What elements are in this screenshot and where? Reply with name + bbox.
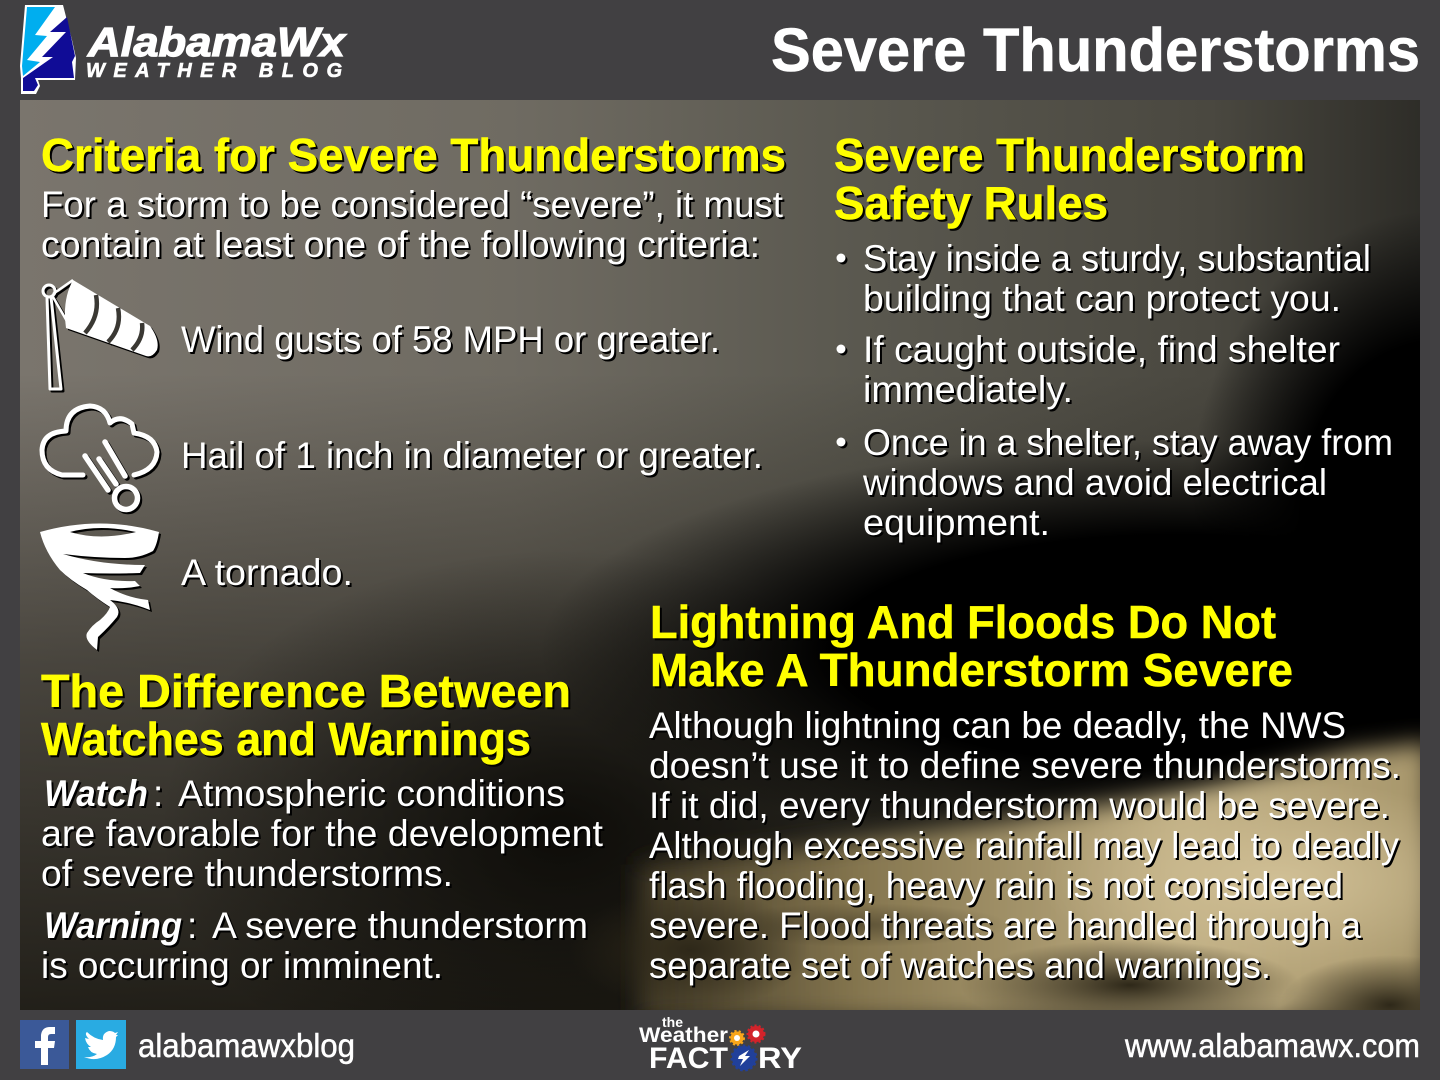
- logo: AlabamaWx Weather Blog: [20, 5, 347, 94]
- text: lightning and floods explanation: flash flooding, heavy rain is not considered: [649, 865, 1343, 906]
- text: lightning and floods explanation: severe. Flood threats are handled through a: [649, 905, 1361, 946]
- heading: lightning and floods: [650, 596, 1293, 696]
- heading: safety rules: Severe Thunderstorm: [834, 129, 1305, 181]
- heading: safety rules: Safety Rules: [834, 177, 1108, 229]
- list: safety rules: equipment.: [863, 502, 1050, 543]
- heading: safety rules: [834, 129, 1305, 229]
- section: criteria for severe thunderstorms: [40, 129, 786, 650]
- text: social handle: alabamawxblog: [138, 1027, 355, 1064]
- text: watch definition: Watch: [44, 773, 148, 814]
- list: safety rules: building that can protect you.: [863, 278, 1341, 319]
- icon: hail cloud: [42, 406, 157, 510]
- icon: blue gear: [732, 1046, 756, 1070]
- icon: facebook: [20, 1020, 69, 1069]
- text: hail criterion: Hail of 1 inch in diameter or greater.: [181, 435, 763, 476]
- text: criteria intro: contain at least one of the following criteria:: [41, 224, 760, 265]
- text: warning definition: is occurring or imminent.: [41, 945, 443, 986]
- text: tornado criterion: A tornado.: [181, 552, 353, 593]
- text: watch definition: :: [153, 773, 163, 814]
- text: watch definition: [41, 773, 604, 894]
- section: watches and warnings: [41, 665, 604, 986]
- list: safety rules: windows and avoid electrical: [862, 462, 1327, 503]
- heading: criteria: Criteria for Severe Thunderstorms: [41, 129, 786, 181]
- text: wind criterion: Wind gusts of 58 MPH or greater.: [181, 319, 720, 360]
- text: lightning and floods explanation: separate set of watches and warnings.: [649, 945, 1271, 986]
- heading: lightning and floods: Make A Thunderstorm Severe: [650, 644, 1293, 696]
- title: Severe Thunderstorms: [771, 16, 1420, 84]
- logo text: RY: RY: [758, 1042, 802, 1075]
- text: lightning and floods explanation: doesn’t use it to define severe thunderstorms.: [649, 745, 1401, 786]
- icon: yellow gear: [730, 1032, 744, 1044]
- icon: red gear: [748, 1026, 764, 1042]
- logo wordmark: AlabamaWx: [87, 19, 347, 65]
- icon: windsock: [43, 280, 158, 389]
- text: lightning and floods explanation: [649, 705, 1401, 986]
- text: watch definition: are favorable for the development: [41, 813, 604, 854]
- text: watch definition: Atmospheric conditions: [178, 773, 565, 814]
- text: warning definition: :: [187, 905, 197, 946]
- text: lightning and floods explanation: Although excessive rainfall may lead to deadly: [649, 825, 1399, 866]
- logo text: the: the: [662, 1014, 683, 1030]
- icon: tornado: [40, 524, 159, 650]
- text: website url: www.alabamawx.com: [1124, 1027, 1420, 1064]
- section: safety rules: [834, 129, 1393, 543]
- text: warning definition: Warning: [44, 905, 182, 946]
- heading: lightning and floods: Lightning And Floods Do Not: [650, 596, 1276, 648]
- logo tagline: WEATHER BLOG: [86, 60, 342, 82]
- text: criteria intro: [41, 184, 784, 265]
- text: warning definition: A severe thunderstorm: [212, 905, 588, 946]
- list: safety rules: Stay inside a sturdy, substantial: [863, 238, 1371, 279]
- list: safety rules: [836, 238, 1393, 543]
- heading: watches vs warnings: [41, 665, 571, 765]
- logo: the Weather Factory: [639, 1014, 802, 1075]
- list: safety rules: Once in a shelter, stay away from: [863, 422, 1393, 463]
- section: lightning and floods: [649, 596, 1401, 986]
- text: lightning and floods explanation: Although lightning can be deadly, the NWS: [649, 705, 1346, 746]
- heading: watches vs warnings: Watches and Warnings: [41, 713, 531, 765]
- list: safety rules: immediately.: [863, 369, 1073, 410]
- text: criteria intro: For a storm to be considered “severe”, it must: [41, 184, 784, 225]
- icon: twitter: [76, 1020, 126, 1069]
- heading: watches vs warnings: The Difference Between: [41, 665, 571, 717]
- logo text: Weather: Weather: [639, 1024, 728, 1047]
- text: warning definition: [41, 905, 588, 986]
- icon: Alabama state with lightning bolt: [20, 5, 76, 94]
- text: lightning and floods explanation: If it did, every thunderstorm would be severe.: [649, 785, 1390, 826]
- list: safety rules: If caught outside, find shelter: [863, 329, 1340, 370]
- logo text: FACT: FACT: [649, 1042, 728, 1075]
- text: watch definition: of severe thunderstorms.: [41, 853, 453, 894]
